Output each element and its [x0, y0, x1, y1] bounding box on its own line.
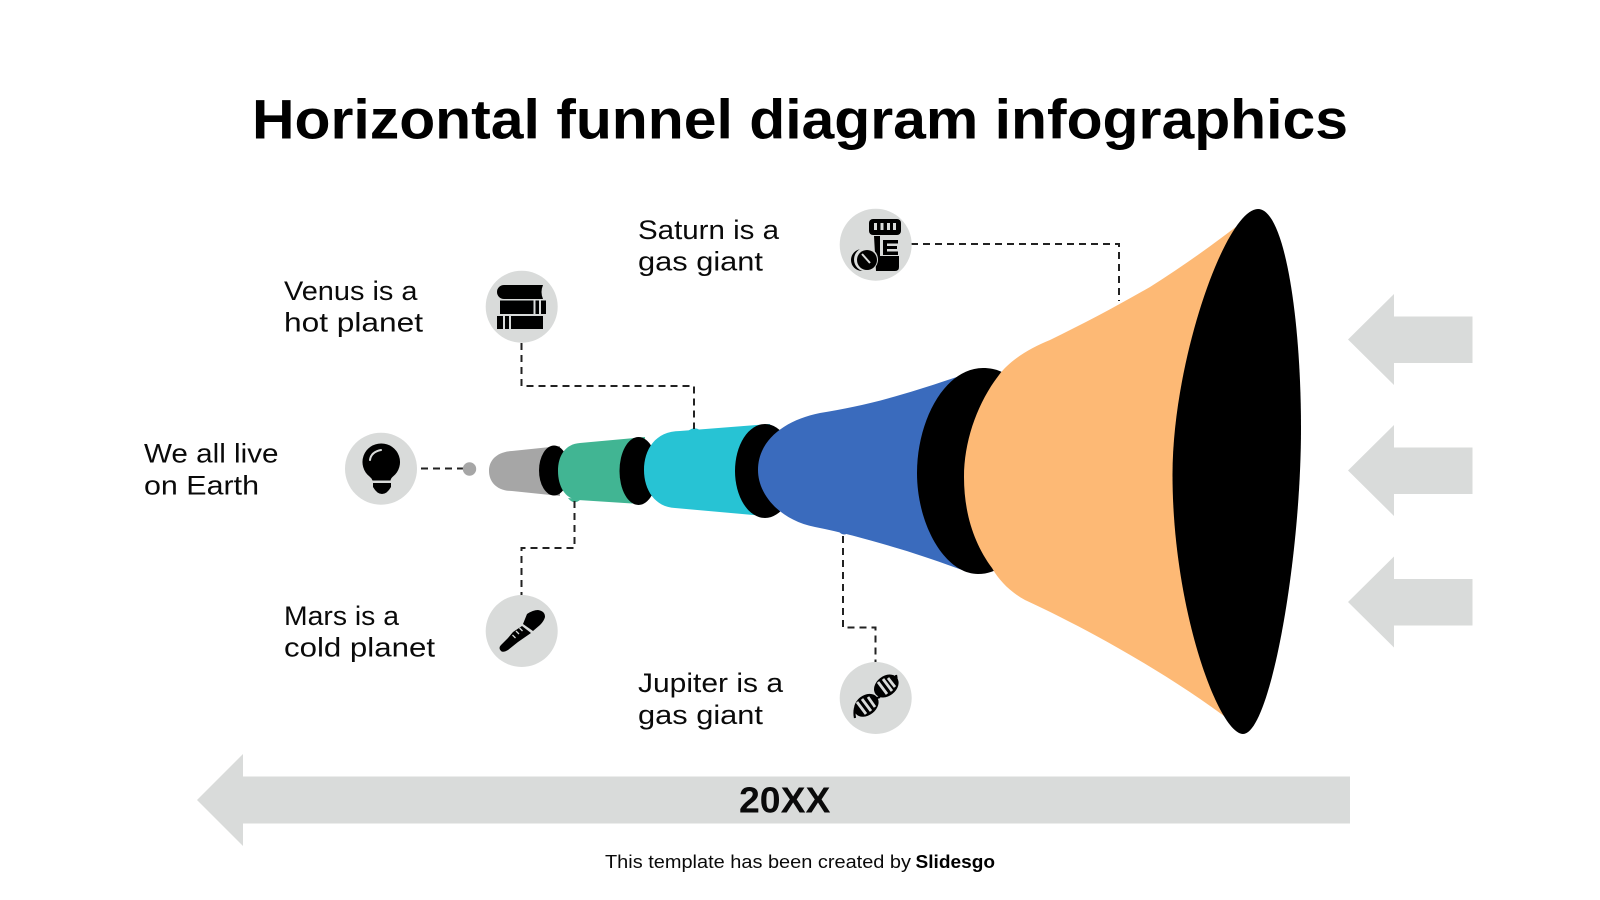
footer credit: Slidesgo — [916, 852, 995, 872]
label: Earth: We all live — [144, 438, 278, 468]
label: Jupiter: gas giant — [638, 700, 764, 730]
label: Saturn — [638, 215, 780, 276]
arrow: input 1 — [1348, 294, 1472, 385]
funnel segment: gray — [489, 446, 560, 496]
label: Saturn: Saturn is a — [638, 215, 780, 245]
title: Horizontal funnel diagram infographics — [252, 88, 1348, 150]
funnel segment: orange — [964, 220, 1260, 722]
icon: medicine bottle — [840, 209, 912, 281]
label: Earth: on Earth — [144, 470, 259, 500]
icon: lightbulb — [345, 433, 417, 505]
connector: Jupiter — [843, 536, 876, 663]
label: Mars — [284, 601, 436, 662]
label: Jupiter — [638, 668, 784, 730]
funnel mouth — [1172, 209, 1301, 734]
funnel diagram — [489, 209, 1301, 734]
icon: books — [486, 271, 558, 343]
label: Saturn: gas giant — [638, 246, 764, 276]
label: Jupiter: Jupiter is a — [638, 668, 784, 698]
funnel segment: green — [558, 437, 645, 504]
connector: Mars — [522, 501, 574, 596]
connector: Venus — [522, 343, 694, 429]
funnel ring 3 — [735, 424, 795, 518]
label: Mars: Mars is a — [284, 601, 400, 631]
arrow: input 2 — [1348, 425, 1472, 516]
label: Mars: cold planet — [284, 632, 436, 662]
connector: Earth — [421, 462, 476, 476]
funnel ring 4 — [917, 368, 1020, 574]
funnel ring 1 — [539, 446, 569, 496]
timeline arrow — [197, 754, 1350, 846]
arrow: input 3 — [1348, 556, 1472, 648]
timeline label: 20XX — [739, 780, 830, 820]
icon: DNA — [840, 662, 912, 734]
funnel ring 2 — [620, 437, 658, 505]
funnel segment: blue — [758, 371, 975, 571]
icon: thermometer — [486, 595, 558, 667]
footer credit: This template has been created by — [605, 852, 911, 872]
connector: Saturn — [911, 244, 1119, 301]
label: Earth — [144, 438, 278, 500]
label: Venus: Venus is a — [284, 276, 419, 306]
label: Venus: hot planet — [284, 308, 424, 338]
funnel segment: cyan — [644, 424, 770, 516]
connector nubs — [568, 428, 850, 535]
label: Venus — [284, 276, 424, 338]
